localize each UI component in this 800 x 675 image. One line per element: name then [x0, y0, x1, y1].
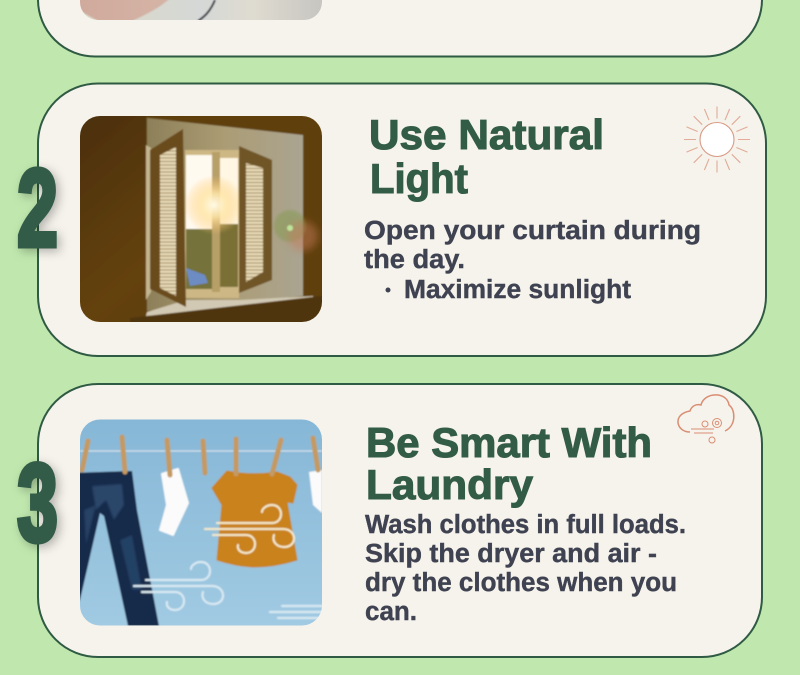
text: curtain tip: the day.	[364, 246, 465, 274]
heading: be smart with laundry: Be Smart With	[366, 419, 652, 466]
icon: cloud with wind	[678, 395, 734, 443]
number 2: 2	[17, 147, 58, 270]
wind swirls	[205, 505, 294, 553]
text: laundry tip: can.	[365, 598, 417, 626]
heading: use natural light	[369, 111, 604, 202]
heading: be smart with laundry	[366, 419, 652, 508]
text: curtain tip: Maximize sunlight	[404, 276, 632, 304]
text: laundry tip: Wash clothes in full loads.	[365, 511, 686, 539]
photo: hand holding cable	[80, 0, 322, 20]
orange shirt	[212, 471, 297, 567]
photo: clothes on a line	[80, 420, 322, 626]
photo: sunlit window	[80, 116, 322, 322]
icon: sun	[684, 106, 750, 172]
text: curtain tip: Open your curtain during	[364, 217, 701, 245]
panel: card 2 natural light	[17, 84, 766, 356]
panel: card 1 (cropped)	[38, 0, 762, 56]
text: laundry tip	[365, 511, 686, 626]
heading: use natural light: Light	[370, 155, 468, 202]
text: laundry tip: Skip the dryer and air -	[365, 540, 657, 568]
heading: be smart with laundry: Laundry	[366, 461, 534, 508]
heading: use natural light: Use Natural	[369, 111, 604, 158]
jeans	[70, 471, 159, 626]
text: laundry tip: dry the clothes when you	[365, 569, 677, 597]
panel: card 3 laundry	[17, 384, 762, 657]
text: curtain tip	[364, 217, 701, 304]
clothespins	[82, 437, 318, 475]
socks	[160, 469, 188, 535]
number 3: 3	[17, 442, 58, 565]
